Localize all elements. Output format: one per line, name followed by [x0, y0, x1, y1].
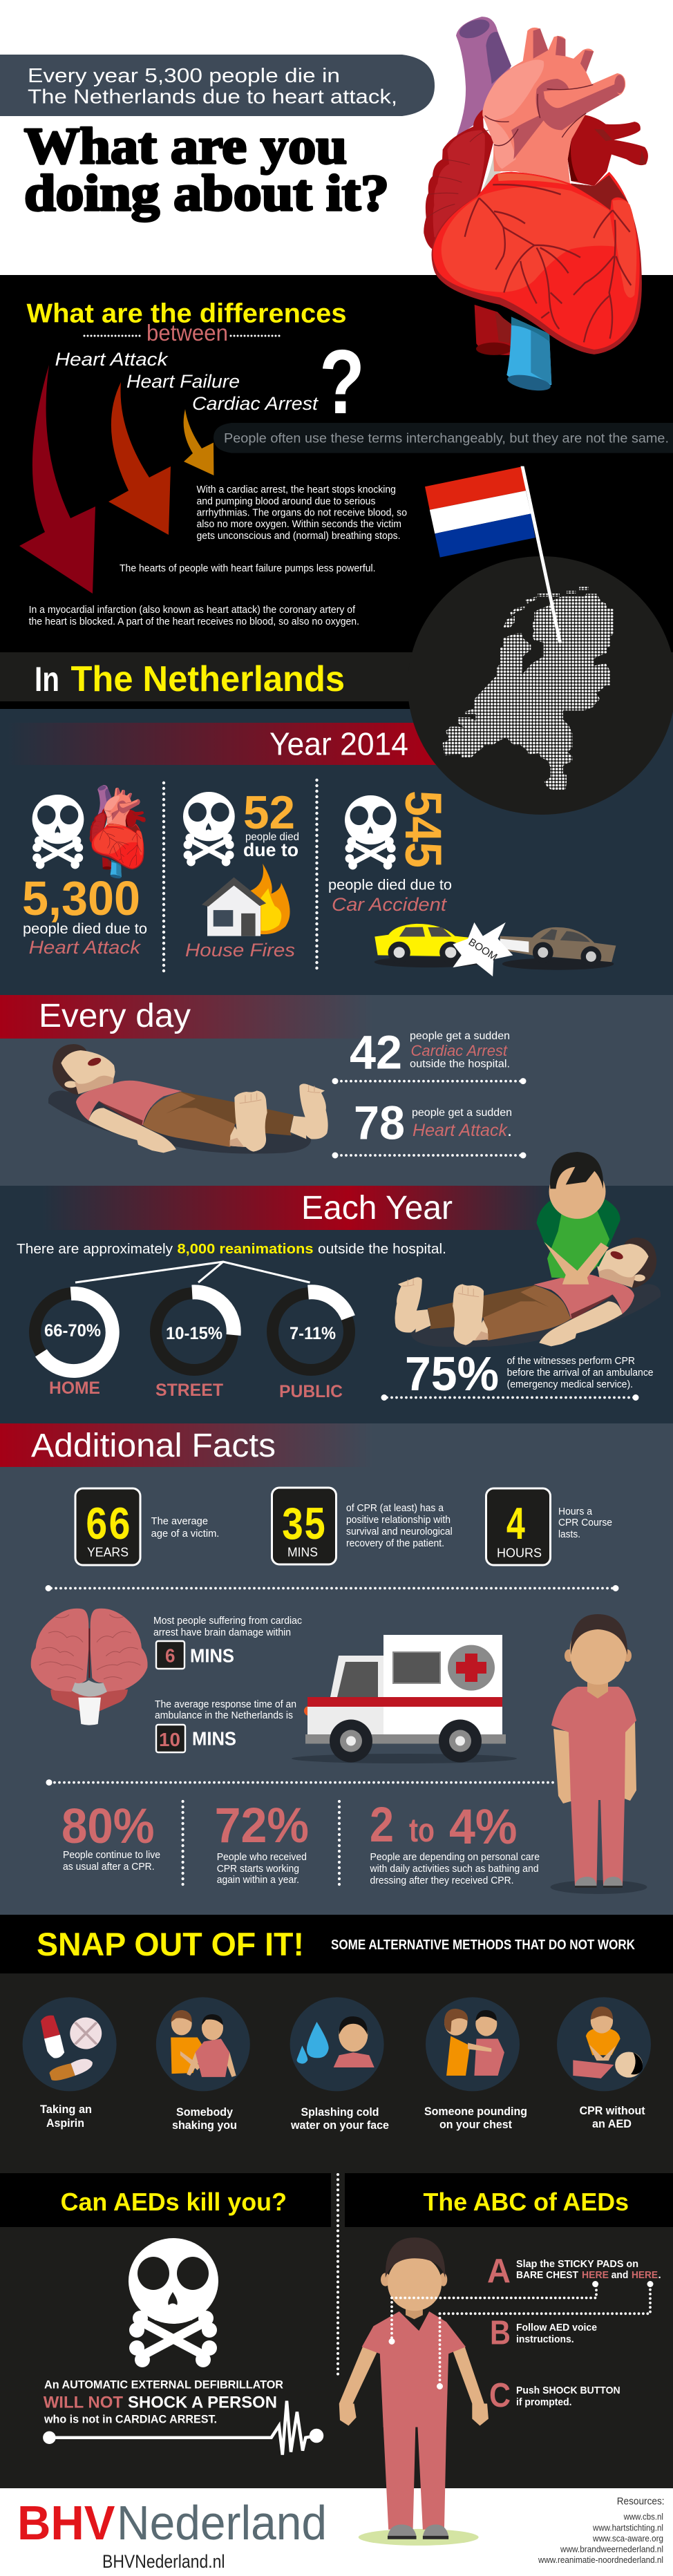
banner: year 2014 [0, 723, 442, 765]
text: brain damage [153, 1616, 302, 1669]
stat: 72 percent: People who received [217, 1852, 307, 1863]
text: aed will not shock: WILL NOT [44, 2394, 123, 2412]
stat: 72 percent [215, 1799, 309, 1886]
icon: pulse line [44, 2400, 322, 2455]
title: What are you [24, 118, 347, 175]
stat: 75 percent [405, 1347, 654, 1401]
terms: heart attack, failure, cardiac arrest: Heart Attack [55, 349, 169, 370]
step c: shock button [489, 2377, 620, 2414]
item: somebody shaking you [156, 1997, 250, 2132]
text: cardiac arrest [196, 484, 407, 542]
stat: house fires: 52 [243, 786, 295, 839]
stat: 75 percent: of the witnesses perform CPR [507, 1356, 635, 1367]
step a: sticky pads: HERE [582, 2269, 609, 2281]
stat: 2 to 4 percent [370, 1798, 540, 1886]
banner: additional facts [0, 1423, 387, 1467]
terms: heart attack, failure, cardiac arrest: Cardiac Arrest [192, 393, 319, 414]
timer: 35 mins: survival and neurological [346, 1526, 453, 1537]
icon: brain [31, 1609, 148, 1725]
step b: voice instructions: B [490, 2314, 511, 2351]
text: aed will not shock: An AUTOMATIC EXTERNAL DEFIBRILLATOR [44, 2378, 283, 2391]
text: heart attack: the heart is blocked. A part of the heart receives no blood, so also no oxygen. [29, 616, 359, 627]
timer: 66 years [75, 1488, 219, 1565]
heading: what are the differences: What are the differences [26, 299, 347, 329]
step a: sticky pads: . [658, 2269, 661, 2281]
heading: in the netherlands: The Netherlands [70, 659, 345, 699]
divider dots [164, 780, 316, 972]
stat: 2 to 4 percent: 2 [370, 1798, 394, 1853]
stat: car accident: 545 [395, 790, 452, 868]
resources list: www.sca-aware.org [592, 2534, 663, 2544]
stat: 78 heart attack: Heart Attack. [413, 1121, 512, 1140]
timer: 35 mins: of CPR (at least) has a [346, 1503, 444, 1514]
intro text: Every year 5,300 people die in [28, 65, 340, 87]
chart: donut street [155, 1292, 234, 1400]
timer: 4 hours: Hours a [558, 1506, 593, 1517]
text: brain damage: Most people suffering from cardiac [153, 1616, 302, 1627]
text: cardiac arrest: gets unconscious and (normal) breathing stops. [196, 531, 401, 542]
terms: heart attack, failure, cardiac arrest: Heart Failure [126, 371, 240, 392]
step a: sticky pads: HERE [632, 2269, 658, 2281]
step a: sticky pads: A [487, 2253, 511, 2290]
text: cardiac arrest: With a cardiac arrest, the heart stops knocking [196, 484, 396, 495]
text: brain damage: 6 [165, 1645, 176, 1667]
text: 8000 reanimations: 8,000 reanimations [177, 1241, 314, 1257]
panel: intro pill [0, 55, 435, 116]
resources list: www.cbs.nl [623, 2512, 663, 2522]
arrow: heart failure [108, 382, 171, 535]
stat: house fires: House Fires [185, 940, 295, 960]
title: doing about it? [24, 165, 389, 222]
chart: donut public [272, 1292, 350, 1401]
stat: heart attack: 5,300 [22, 871, 140, 925]
icon: dutch flag [425, 466, 562, 643]
stat: 75 percent: before the arrival of an ambulance [507, 1367, 654, 1379]
heading: can aeds kill you: Can AEDs kill you? [61, 2188, 287, 2216]
text: aed will not shock: SHOCK A PERSON [128, 2394, 277, 2412]
item: taking an aspirin: Aspirin [46, 2117, 84, 2130]
step c: shock button: if prompted. [516, 2396, 572, 2408]
chart: donut street: STREET [155, 1381, 223, 1400]
icon: question mark: ? [319, 331, 365, 433]
stat: 80 percent: as usual after a CPR. [63, 1862, 155, 1873]
stat: 78 heart attack [354, 1096, 512, 1150]
timer: 66 years: YEARS [87, 1546, 129, 1560]
text: cardiac arrest: also no more oxygen. Within seconds the victim [196, 519, 401, 530]
timer: 35 mins: 35 [281, 1500, 326, 1553]
step b: voice instructions: instructions. [516, 2333, 574, 2345]
stat: 2 to 4 percent: dressing after they received CPR. [370, 1875, 514, 1886]
stat: 72 percent: 72% [215, 1799, 309, 1853]
timer: 4 hours: lasts. [558, 1529, 580, 1540]
item: someone pounding on chest: on your chest [439, 2119, 512, 2131]
step a: sticky pads: BARE CHEST [516, 2269, 578, 2281]
title [24, 118, 389, 222]
illustration: standing nurse [550, 1614, 647, 1894]
timer: 4 hours: HOURS [497, 1546, 542, 1560]
item: someone pounding on chest: Someone pounding [424, 2105, 527, 2118]
panel: netherlands map circle [408, 556, 673, 815]
stat: car accident: people died due to [328, 878, 452, 893]
logo: bhv nederland: BHVNederland.nl [102, 2551, 225, 2572]
icon: shaking [171, 2010, 236, 2077]
stat: 78 heart attack: 78 [354, 1096, 405, 1150]
illustration: man lying on floor [48, 1044, 328, 1154]
item: splashing cold water [290, 1997, 389, 2132]
stat: 2 to 4 percent: People are depending on personal care [370, 1852, 540, 1863]
heading: snap out of it: SNAP OUT OF IT! [37, 1926, 304, 1962]
icon: skull [32, 795, 84, 869]
arrow: cardiac arrest [184, 409, 214, 475]
stat: 2 to 4 percent: with daily activities such as bathing and [370, 1864, 539, 1875]
stat: 42 cardiac arrest: people get a sudden [410, 1030, 510, 1042]
heading: snap out of it [37, 1926, 635, 1962]
step b: voice instructions [490, 2314, 597, 2351]
text: aed will not shock [44, 2378, 283, 2425]
text: 8000 reanimations [17, 1241, 446, 1257]
step b: voice instructions: Follow AED voice [516, 2322, 597, 2333]
item: splashing cold water: Splashing cold [301, 2106, 379, 2119]
stat: 72 percent: again within a year. [217, 1875, 299, 1886]
text: brain damage: arrest have brain damage within [153, 1627, 291, 1638]
banner: every day: Every day [39, 998, 191, 1034]
icon: skull [345, 795, 397, 870]
intro text: The Netherlands due to heart attack, [28, 86, 397, 108]
step c: shock button: Push SHOCK BUTTON [516, 2385, 620, 2396]
stat: 42 cardiac arrest: Cardiac Arrest [410, 1042, 508, 1059]
stat: 75 percent: 75% [405, 1347, 499, 1401]
text: response time: ambulance in the Netherlands is [155, 1710, 293, 1721]
icon: small heart [90, 785, 146, 879]
text: heart failure: The hearts of people with heart failure pumps less powerful. [120, 563, 376, 574]
stat: 80 percent: 80% [61, 1799, 155, 1854]
text: 8000 reanimations: outside the hospital. [318, 1241, 446, 1257]
intro text [28, 65, 397, 108]
text: heart attack [29, 605, 359, 627]
stat: house fires [183, 786, 299, 960]
step a: sticky pads: and [612, 2269, 628, 2281]
icon: two colliding cars [375, 922, 616, 976]
connector lines [75, 1262, 310, 1282]
logo: bhv nederland [17, 2496, 327, 2572]
stat: 75 percent: (emergency medical service). [507, 1379, 633, 1390]
stat: house fires: people died [245, 831, 299, 843]
stat: 2 to 4 percent: to [409, 1812, 435, 1849]
timer: 35 mins: MINS [287, 1546, 318, 1560]
illustration: patient lying [395, 1238, 661, 1347]
item: cpr without aed: CPR without [580, 2105, 645, 2117]
item: taking an aspirin: Taking an [40, 2103, 92, 2116]
text: response time [155, 1699, 296, 1752]
heading: abc of aeds: The ABC of AEDs [423, 2188, 629, 2216]
icon: ambulance [292, 1635, 517, 1763]
timer: 4 hours [486, 1488, 612, 1565]
chart: donut public: 7-11% [290, 1324, 336, 1343]
item: cpr without aed [557, 1997, 651, 2130]
icon: large heart [424, 16, 648, 393]
callout: interchangeably: People often use these terms interchangeably, but they are not the same. [224, 431, 669, 446]
text: response time: MINS [192, 1727, 236, 1750]
text: cardiac arrest: and pumping blood around due to serious [196, 496, 376, 507]
banner: additional facts: Additional Facts [31, 1428, 276, 1464]
stat: heart attack: people died due to [23, 921, 147, 937]
icon: cpr [573, 2007, 643, 2078]
banner: every day [0, 995, 373, 1039]
chart: donut home [35, 1294, 113, 1398]
text: cardiac arrest: arrhythmias. The organs do not receive blood, so [196, 507, 407, 518]
banner: each year: Each Year [301, 1190, 453, 1227]
stat: 42 cardiac arrest: outside the hospital. [410, 1059, 510, 1070]
icon: water drops [297, 2016, 375, 2067]
text: 8000 reanimations: There are approximately [17, 1241, 173, 1257]
map of the netherlands [443, 587, 614, 790]
text: aed will not shock: who is not in CARDIAC ARREST. [44, 2413, 217, 2425]
item: someone pounding on chest [424, 1997, 527, 2131]
terms: heart attack, failure, cardiac arrest [55, 349, 319, 414]
item: cpr without aed: an AED [592, 2118, 632, 2130]
timer: 35 mins [272, 1488, 453, 1564]
stat: 42 cardiac arrest [350, 1025, 510, 1079]
icon: skull [183, 792, 235, 866]
logo: bhv nederland: Nederland [117, 2496, 327, 2550]
resources list: Resources: [617, 2496, 665, 2508]
timer: 35 mins: recovery of the patient. [346, 1538, 444, 1549]
timer: 66 years: 66 [85, 1500, 131, 1553]
stat: heart attack [22, 785, 147, 958]
text: year 2014: Year 2014 [269, 726, 408, 761]
icon: large skull [129, 2238, 218, 2367]
icon: pounding [444, 2009, 504, 2076]
step a: sticky pads: Slap the STICKY PADS on [516, 2258, 638, 2270]
stat: 72 percent: CPR starts working [217, 1864, 299, 1875]
heading: what are the differences: between [146, 320, 228, 345]
timer: 66 years: age of a victim. [151, 1528, 219, 1540]
illustration: rescuer doing cpr [536, 1152, 620, 1285]
stat: car accident [328, 790, 616, 976]
stat: house fires: due to [243, 840, 298, 860]
stat: 42 cardiac arrest: 42 [350, 1025, 402, 1079]
resources list: www.brandweernederland.nl [560, 2544, 663, 2554]
stat: 78 heart attack: people get a sudden [412, 1107, 512, 1119]
step c: shock button: C [489, 2377, 511, 2414]
callout: interchangeably [214, 423, 673, 453]
stat: 80 percent: People continue to live [63, 1850, 160, 1861]
chart: donut home: HOME [49, 1379, 100, 1398]
text: heart attack: In a myocardial infarction (also known as heart attack) the coronary artery of [29, 605, 356, 616]
stat: car accident: Car Accident [332, 894, 448, 915]
illustration: person with aed pad positions [339, 2237, 489, 2546]
text: response time: 10 [159, 1729, 180, 1750]
timer: 4 hours: CPR Course [558, 1517, 612, 1528]
timer: 35 mins: positive relationship with [346, 1515, 451, 1526]
timer: 66 years: The average [151, 1516, 208, 1527]
chart: donut home: 66-70% [44, 1321, 101, 1341]
text: response time: The average response time of an [155, 1699, 296, 1710]
stat: 2 to 4 percent: 4% [449, 1800, 517, 1855]
logo: bhv nederland: BHV [17, 2496, 115, 2550]
banner: each year [41, 1186, 553, 1230]
heading: in the netherlands: In [35, 660, 59, 699]
item: somebody shaking you: Somebody [176, 2106, 234, 2119]
item: splashing cold water: water on your face [290, 2119, 389, 2132]
icon: pills [41, 2016, 102, 2081]
item: somebody shaking you: shaking you [172, 2119, 237, 2132]
chart: donut street: 10-15% [166, 1324, 222, 1343]
stat: car accident: BOOM [466, 936, 500, 963]
text: brain damage: MINS [190, 1645, 234, 1667]
pad connector dots [392, 2284, 650, 2387]
arrow: heart attack [19, 365, 95, 594]
resources list [538, 2496, 665, 2565]
stat: heart attack: Heart Attack [29, 937, 142, 958]
resources list: www.reanimatie-noordnederland.nl [538, 2555, 663, 2565]
heading: what are the differences [26, 299, 347, 345]
item: taking an aspirin [23, 1997, 117, 2130]
timer: 4 hours: 4 [506, 1500, 526, 1553]
resources list: www.hartstichting.nl [592, 2523, 663, 2533]
icon: burning house [202, 864, 290, 936]
step a: sticky pads [487, 2253, 661, 2290]
chart: donut public: PUBLIC [279, 1382, 343, 1401]
